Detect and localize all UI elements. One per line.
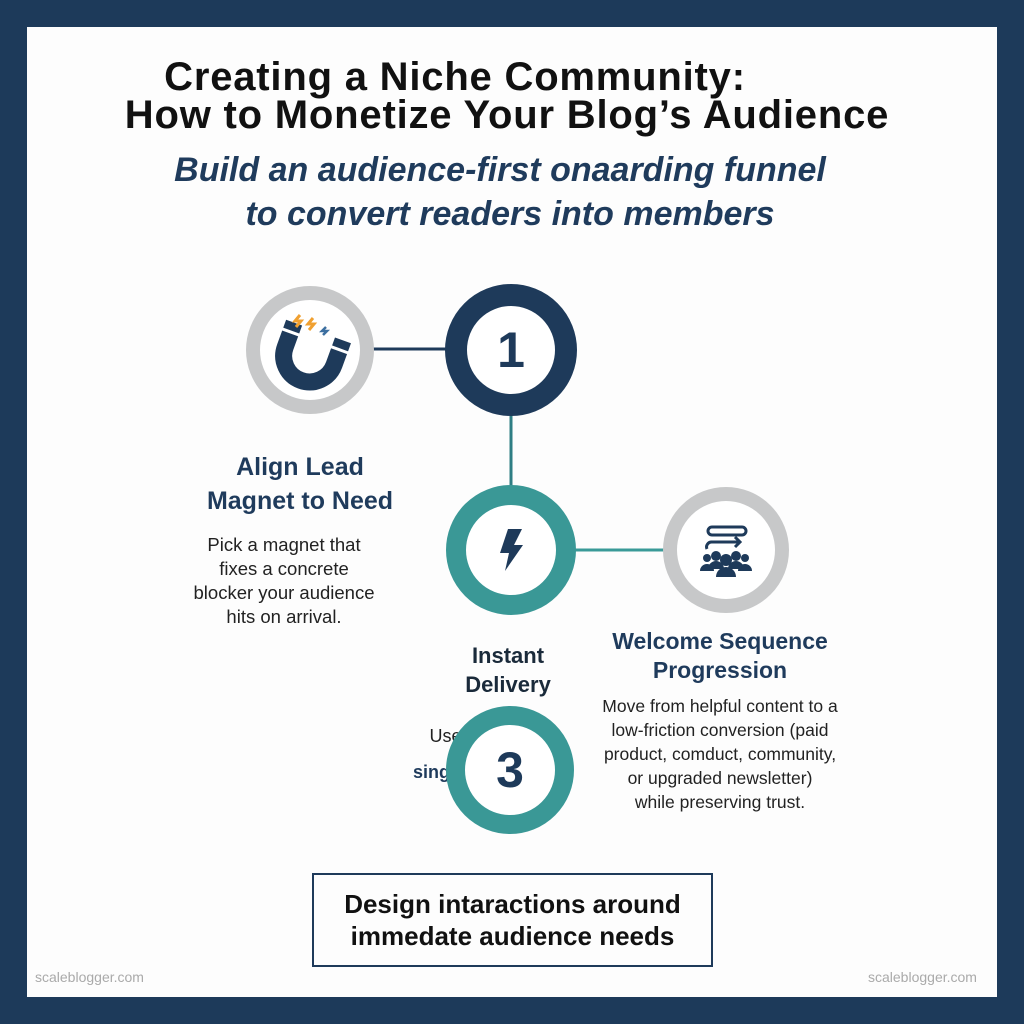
subtitle: Build an audience-first onaarding funnel xyxy=(174,151,826,189)
heading: align lead magnet xyxy=(207,453,393,515)
text: align body: blocker your audience xyxy=(194,582,374,603)
subtitle xyxy=(174,151,826,233)
step 3 circle xyxy=(446,706,574,834)
step 3 circle: 3 xyxy=(496,742,524,798)
heading: instant delivery: Delivery xyxy=(465,672,551,697)
heading: instant delivery xyxy=(465,643,551,697)
icon: lightning circle xyxy=(446,485,576,615)
icon: community circle xyxy=(663,487,789,613)
text: welcome body: while preserving trust. xyxy=(635,792,805,812)
text: welcome body xyxy=(602,696,838,812)
icon: magnet xyxy=(246,286,374,414)
text: welcome body: Move from helpful content to a xyxy=(602,696,838,716)
heading: welcome sequence xyxy=(612,628,828,683)
title xyxy=(125,55,889,137)
step 1 circle: 1 xyxy=(497,322,525,378)
text: align body: Pick a magnet that xyxy=(207,534,361,555)
text: welcome body: or upgraded newsletter) xyxy=(628,768,812,788)
text: align body: hits on arrival. xyxy=(226,606,342,627)
heading: instant delivery: Instant xyxy=(472,643,544,668)
subtitle: to convert readers into members xyxy=(245,195,775,233)
text: welcome body: low-friction conversion (paid xyxy=(612,720,828,740)
text: instant delivery body (partially hidden) xyxy=(413,726,567,782)
callout box: Design intaractions around xyxy=(344,889,681,919)
text: align body: fixes a concrete xyxy=(219,558,349,579)
callout box: immedate audience needs xyxy=(351,921,674,951)
title: Creating a Niche Community: xyxy=(164,55,746,99)
footer left: scaleblogger.com xyxy=(35,969,144,985)
heading: align lead magnet: Align Lead xyxy=(236,453,364,481)
step 1 circle xyxy=(445,284,577,416)
text: instant delivery body (partially hidden): single delivery for xyxy=(413,762,567,782)
heading: align lead magnet: Magnet to Need xyxy=(207,487,393,515)
text: instant delivery body (partially hidden): Use single-opt- xyxy=(429,726,551,746)
text: welcome body: product, comduct, community, xyxy=(604,744,836,764)
text: align body xyxy=(194,534,374,627)
title: How to Monetize Your Blog’s Audience xyxy=(125,93,889,137)
callout box xyxy=(312,873,713,967)
footer right: scaleblogger.com xyxy=(868,969,977,985)
heading: welcome sequence: Progression xyxy=(653,657,787,683)
heading: welcome sequence: Welcome Sequence xyxy=(612,628,828,654)
